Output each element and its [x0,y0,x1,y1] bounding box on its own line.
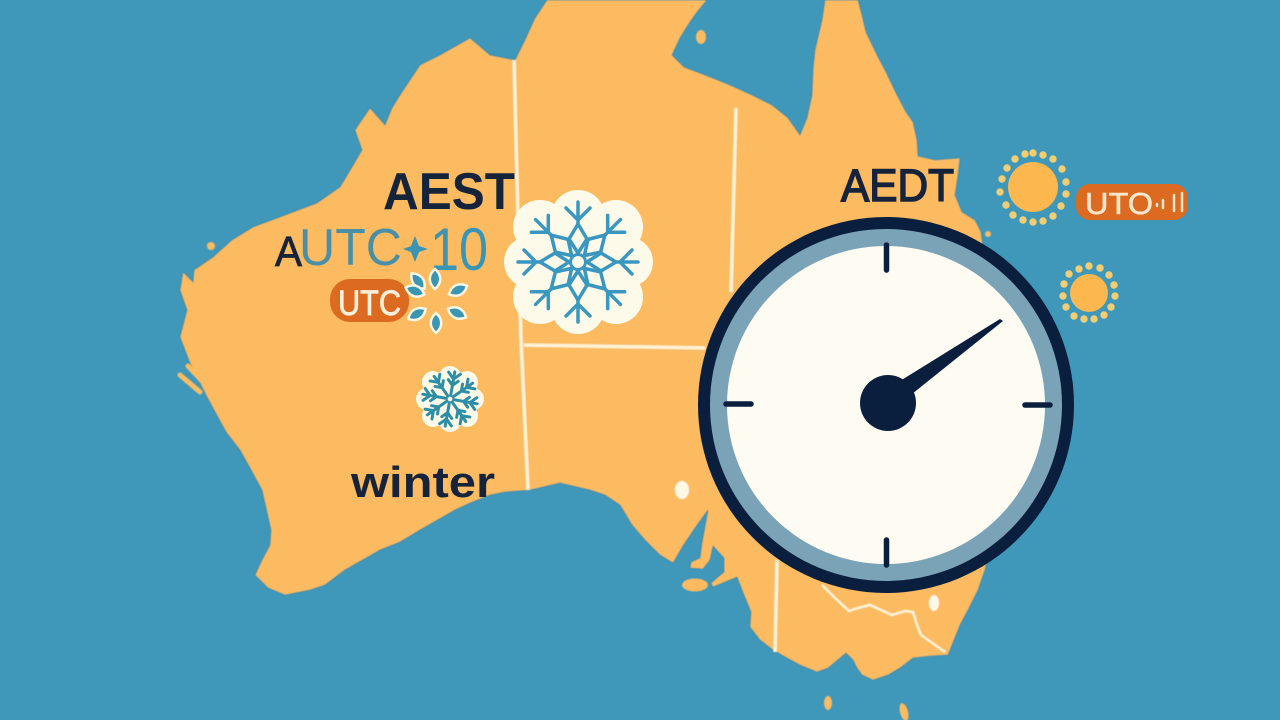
label: AUTC+10: UTC [299,219,402,277]
clock ticks [726,245,1050,565]
mainland [180,0,1000,680]
icon: scattered snowflake fragments [404,269,469,333]
label: AUTC+10: 10 [430,216,488,283]
heading: AEST: AEST [383,163,515,221]
icon: small sun [1059,262,1119,323]
label: AUTC+10 [275,216,488,283]
clock hand [900,319,1003,394]
islands [682,578,708,592]
clock inner ring [710,229,1062,581]
label: AUTC+10: A [275,228,302,276]
icon: large snowflake [504,190,653,334]
state borders [514,60,528,490]
heading: AEDT: AEDT [841,160,954,211]
map: Australia [180,0,1000,720]
lakes [675,481,689,499]
clock bezel [698,217,1074,593]
badge: UTO [1076,184,1188,221]
badge: UTO: UTO [1085,186,1153,221]
clock face [727,246,1045,564]
icon: large sun [996,149,1070,226]
icon: clock [698,217,1074,593]
label: winter: winter [350,458,495,507]
clock hub [860,375,916,431]
badge: UTC: UTC [338,284,401,323]
icon: small snowflake [416,366,484,432]
